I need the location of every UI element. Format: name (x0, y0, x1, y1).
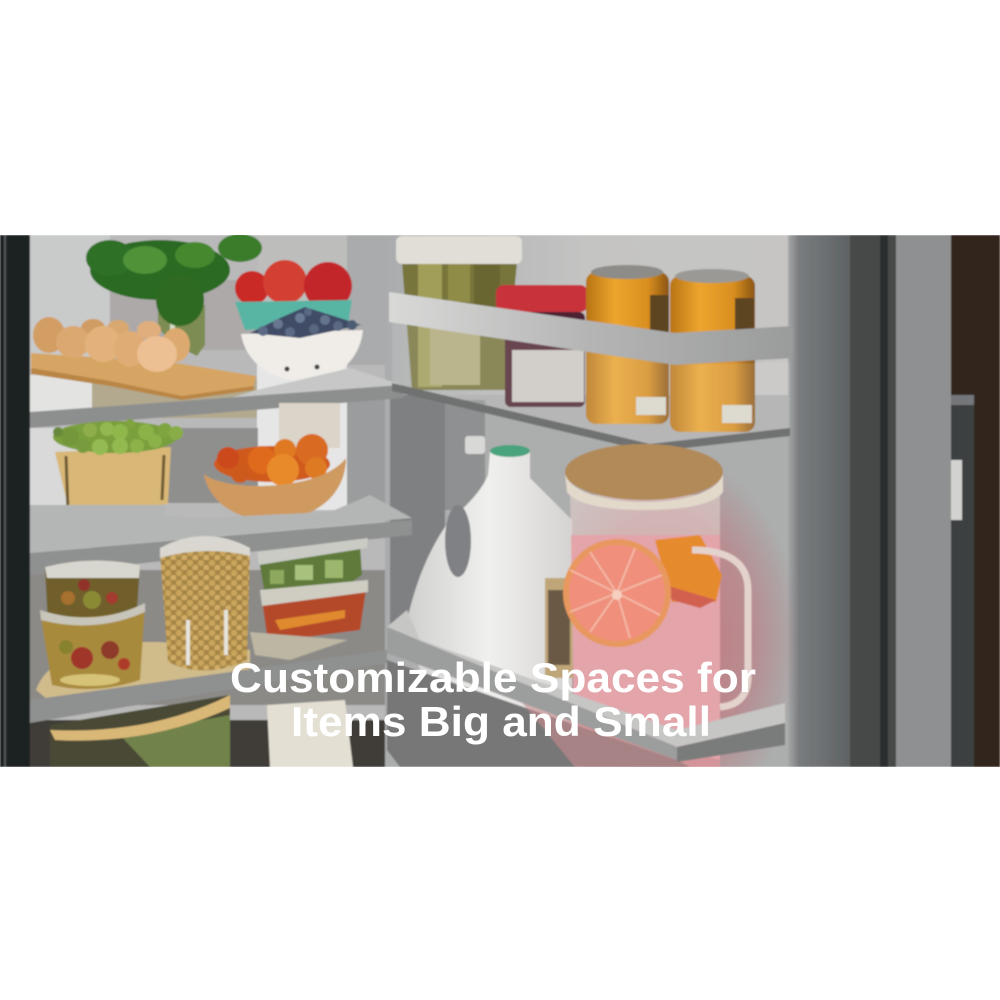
icon: beige plate on lower shelf (36, 641, 251, 698)
icon: parsley plant in vase (86, 234, 262, 356)
icon: chickpea container (160, 536, 250, 671)
icon: door bin knob (465, 436, 485, 454)
icon: eggs on wooden board (31, 317, 256, 400)
door inner liner (385, 235, 790, 767)
panel: lower door bin (387, 610, 785, 767)
panel: pink glow behind pitcher (572, 486, 788, 767)
icon: milk jug (408, 444, 574, 724)
title line 1: Customizable Spaces for (230, 654, 756, 701)
icon: jam jar (496, 285, 588, 407)
infographic: refrigerator scene (0, 235, 1000, 767)
icon: pickle tub (396, 236, 522, 390)
panel: middle glass shelf (30, 495, 412, 575)
icon: apples in green basket (235, 260, 352, 330)
icon: stacked food containers left (40, 560, 145, 689)
icon: bowl of salad below shelf (50, 695, 230, 767)
icon: white bowl of blueberries (241, 307, 363, 381)
icon: grapefruit slice (563, 539, 671, 647)
icon: orange cans (586, 265, 755, 432)
icon: container behind upper shelf (279, 403, 340, 448)
fridge interior wall (28, 235, 386, 767)
panel: upper glass shelf (30, 368, 403, 428)
icon: glass containers with vegetables (250, 538, 368, 660)
icon: orange peppers in wooden bowl (204, 434, 346, 520)
door handle (951, 395, 974, 767)
panel: lower glass shelf (30, 650, 387, 723)
heading (230, 654, 756, 745)
panel: upper door bin (389, 292, 793, 452)
left cabinet edge (0, 235, 30, 767)
icon: white box below shelf (267, 700, 353, 767)
title line 2: Items Big and Small (291, 698, 711, 745)
icon: glass pitcher with grapefruit (563, 444, 748, 767)
panel: photo of open refrigerator (0, 235, 1000, 767)
icon: grapes in wooden crate (53, 419, 183, 515)
door right side (788, 235, 1000, 767)
